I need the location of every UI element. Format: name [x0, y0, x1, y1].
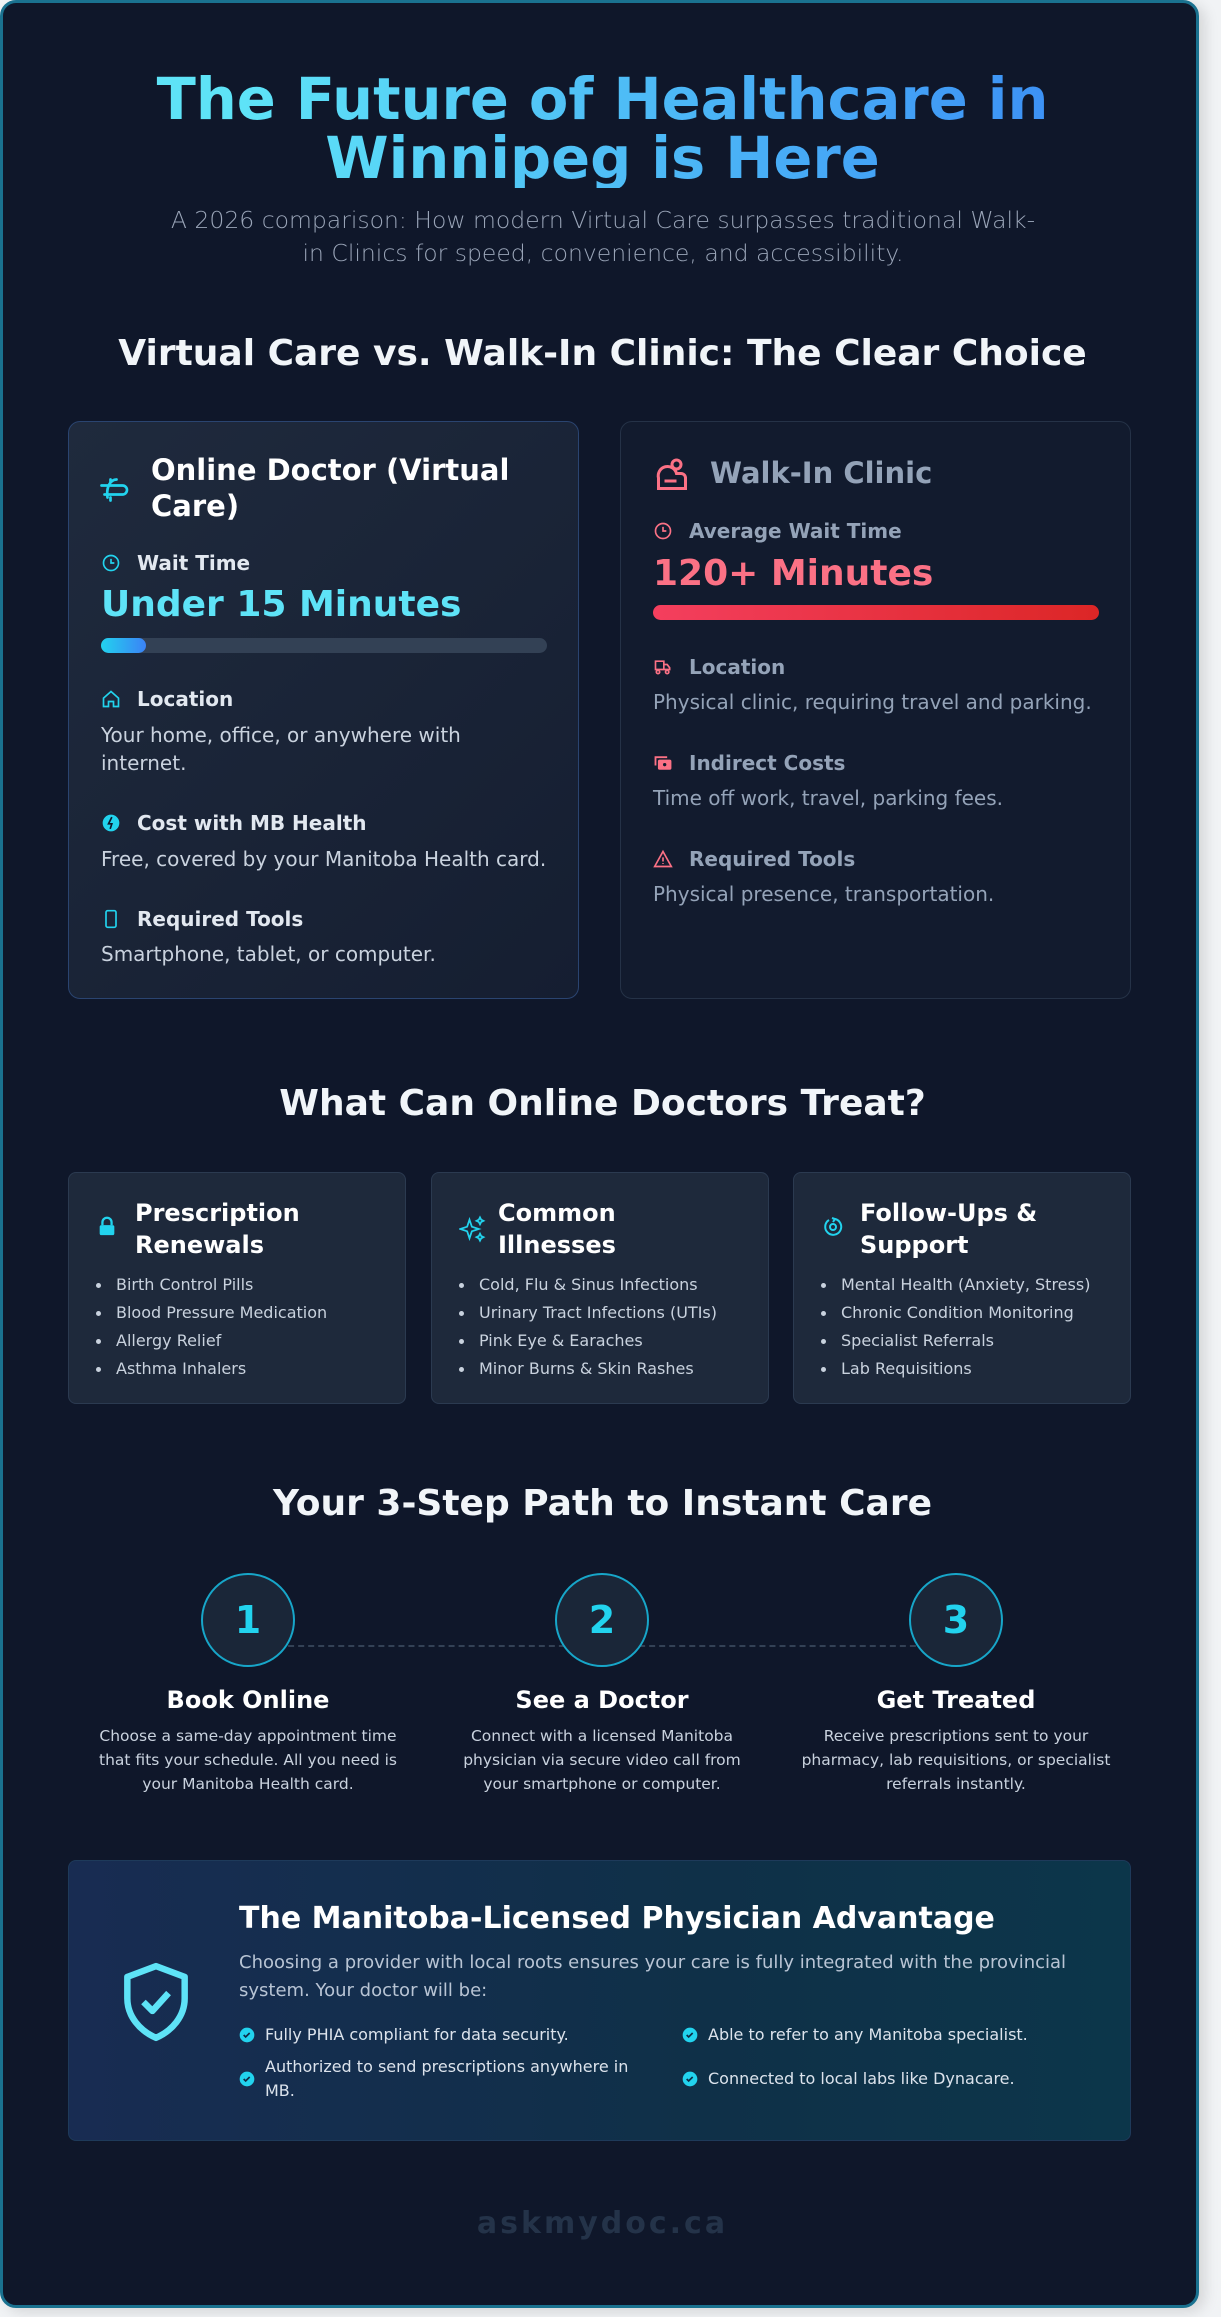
- panel: walk-in clinic: [620, 421, 1131, 999]
- checklist: [240, 2025, 1028, 2100]
- panel: prescription renewals: Renewals: [135, 1231, 264, 1259]
- panel: common illnesses: Illnesses: [498, 1231, 616, 1259]
- item: location: Location: [689, 655, 785, 679]
- checklist: Connected to local labs like Dynacare.: [708, 2069, 1015, 2088]
- item: cost: Cost with MB Health: [137, 811, 367, 835]
- subtitle: in Clinics for speed, convenience, and accessibility.: [303, 239, 903, 267]
- item: indirect costs: Indirect Costs: [689, 751, 845, 775]
- step 2: See a Doctor: [515, 1686, 689, 1714]
- step 2: Connect with a licensed Manitoba physician via secure video call from your smartphone or computer.: [463, 1727, 741, 1793]
- heading: treat: What Can Online Doctors Treat?: [279, 1083, 926, 1124]
- panel: prescription renewals: Blood Pressure Medication: [116, 1303, 327, 1322]
- title: [3, 70, 1202, 188]
- panel: follow-ups: Mental Health (Anxiety, Stress): [841, 1275, 1090, 1294]
- checklist: Able to refer to any Manitoba specialist.: [708, 2025, 1028, 2044]
- panel: online doctor: Smartphone, tablet, or computer.: [101, 942, 436, 966]
- panel: common illnesses: [431, 1172, 769, 1404]
- icon: virtual care: [100, 478, 128, 502]
- label: wait time: Wait Time: [137, 551, 250, 575]
- step 3: Receive prescriptions sent to your pharmacy, lab requisitions, or specialist referrals instantly.: [802, 1727, 1110, 1793]
- step 2: [463, 1573, 741, 1793]
- panel: follow-ups: Chronic Condition Monitoring: [841, 1303, 1074, 1322]
- icon: follow-up: [824, 1217, 842, 1236]
- panel: online doctor: [68, 421, 579, 999]
- panel: follow-ups: Support: [860, 1231, 969, 1259]
- panel: common illnesses: Urinary Tract Infections (UTIs): [479, 1303, 717, 1322]
- heading: comparison: Virtual Care vs. Walk-In Clinic: The Clear Choice: [118, 333, 1087, 374]
- label: average wait: Average Wait Time: [689, 519, 902, 543]
- icon: shield: [124, 1962, 188, 2042]
- checklist: Authorized to send prescriptions anywhere in MB.: [265, 2057, 628, 2100]
- subtitle: [171, 206, 1035, 267]
- stat: 120+: 120+ Minutes: [653, 553, 933, 594]
- panel: follow-ups: Lab Requisitions: [841, 1359, 972, 1378]
- panel: prescription renewals: Allergy Relief: [116, 1331, 221, 1350]
- step 3: Get Treated: [877, 1686, 1035, 1714]
- icon: sparkles: [459, 1216, 486, 1242]
- stat: under 15: Under 15 Minutes: [101, 584, 461, 625]
- icon: clinic: [656, 458, 687, 490]
- checklist: Fully PHIA compliant for data security.: [265, 2025, 569, 2044]
- bar: full: [653, 605, 1099, 620]
- progress bar: [101, 638, 547, 653]
- item: tools: Required Tools: [689, 847, 855, 871]
- panel: common illnesses: Pink Eye & Earaches: [479, 1331, 643, 1350]
- panel: common illnesses: Minor Burns & Skin Rashes: [479, 1359, 694, 1378]
- step 3: 3: [943, 1598, 969, 1642]
- panel: prescription renewals: Asthma Inhalers: [116, 1359, 246, 1378]
- step 1: [99, 1573, 397, 1793]
- banner text: Choosing a provider with local roots ensures your care is fully integrated with the provincial system. Your doctor will be:: [239, 1952, 1066, 2001]
- item: tools: Required Tools: [137, 907, 303, 931]
- item: location: Location: [137, 687, 233, 711]
- step 2: 2: [589, 1598, 615, 1642]
- panel: prescription renewals: Prescription: [135, 1199, 300, 1227]
- banner title: The Manitoba-Licensed Physician Advantage: [239, 1901, 995, 1936]
- panel: walk-in clinic: Time off work, travel, parking fees.: [653, 786, 1003, 810]
- panel: follow-ups: Follow-Ups &: [860, 1199, 1037, 1227]
- panel: walk-in clinic: Physical presence, transportation.: [653, 882, 994, 906]
- dashed connector: [248, 1645, 956, 1647]
- panel: common illnesses: Cold, Flu & Sinus Infections: [479, 1275, 698, 1294]
- panel: follow-ups: Specialist Referrals: [841, 1331, 994, 1350]
- icon: lock: [100, 1216, 114, 1236]
- step 1: Choose a same-day appointment time that fits your schedule. All you need is your Manitoba Health card.: [99, 1727, 397, 1793]
- step 1: Book Online: [167, 1686, 329, 1714]
- card title: Walk-In Clinic: [710, 456, 932, 490]
- step 1: 1: [235, 1598, 261, 1642]
- title: The Future of Healthcare in: [157, 66, 1048, 133]
- card title: Online Doctor (Virtual Care): [151, 453, 509, 523]
- panel: follow-ups: [793, 1172, 1131, 1404]
- footer: askmydoc.ca: [477, 2206, 728, 2241]
- panel: prescription renewals: Birth Control Pills: [116, 1275, 253, 1294]
- panel: prescription renewals: [68, 1172, 406, 1404]
- panel: online doctor: Your home, office, or anywhere with internet.: [101, 723, 461, 775]
- title: Winnipeg is Here: [325, 125, 880, 192]
- heading: steps: Your 3-Step Path to Instant Care: [273, 1483, 932, 1524]
- panel: online doctor: Free, covered by your Manitoba Health card.: [101, 847, 546, 871]
- panel: walk-in clinic: Physical clinic, requiring travel and parking.: [653, 690, 1092, 714]
- step 3: [802, 1573, 1110, 1793]
- subtitle: A 2026 comparison: How modern Virtual Care surpasses traditional Walk-: [171, 206, 1035, 234]
- banner: physician advantage: [68, 1860, 1131, 2141]
- panel: common illnesses: Common: [498, 1199, 616, 1227]
